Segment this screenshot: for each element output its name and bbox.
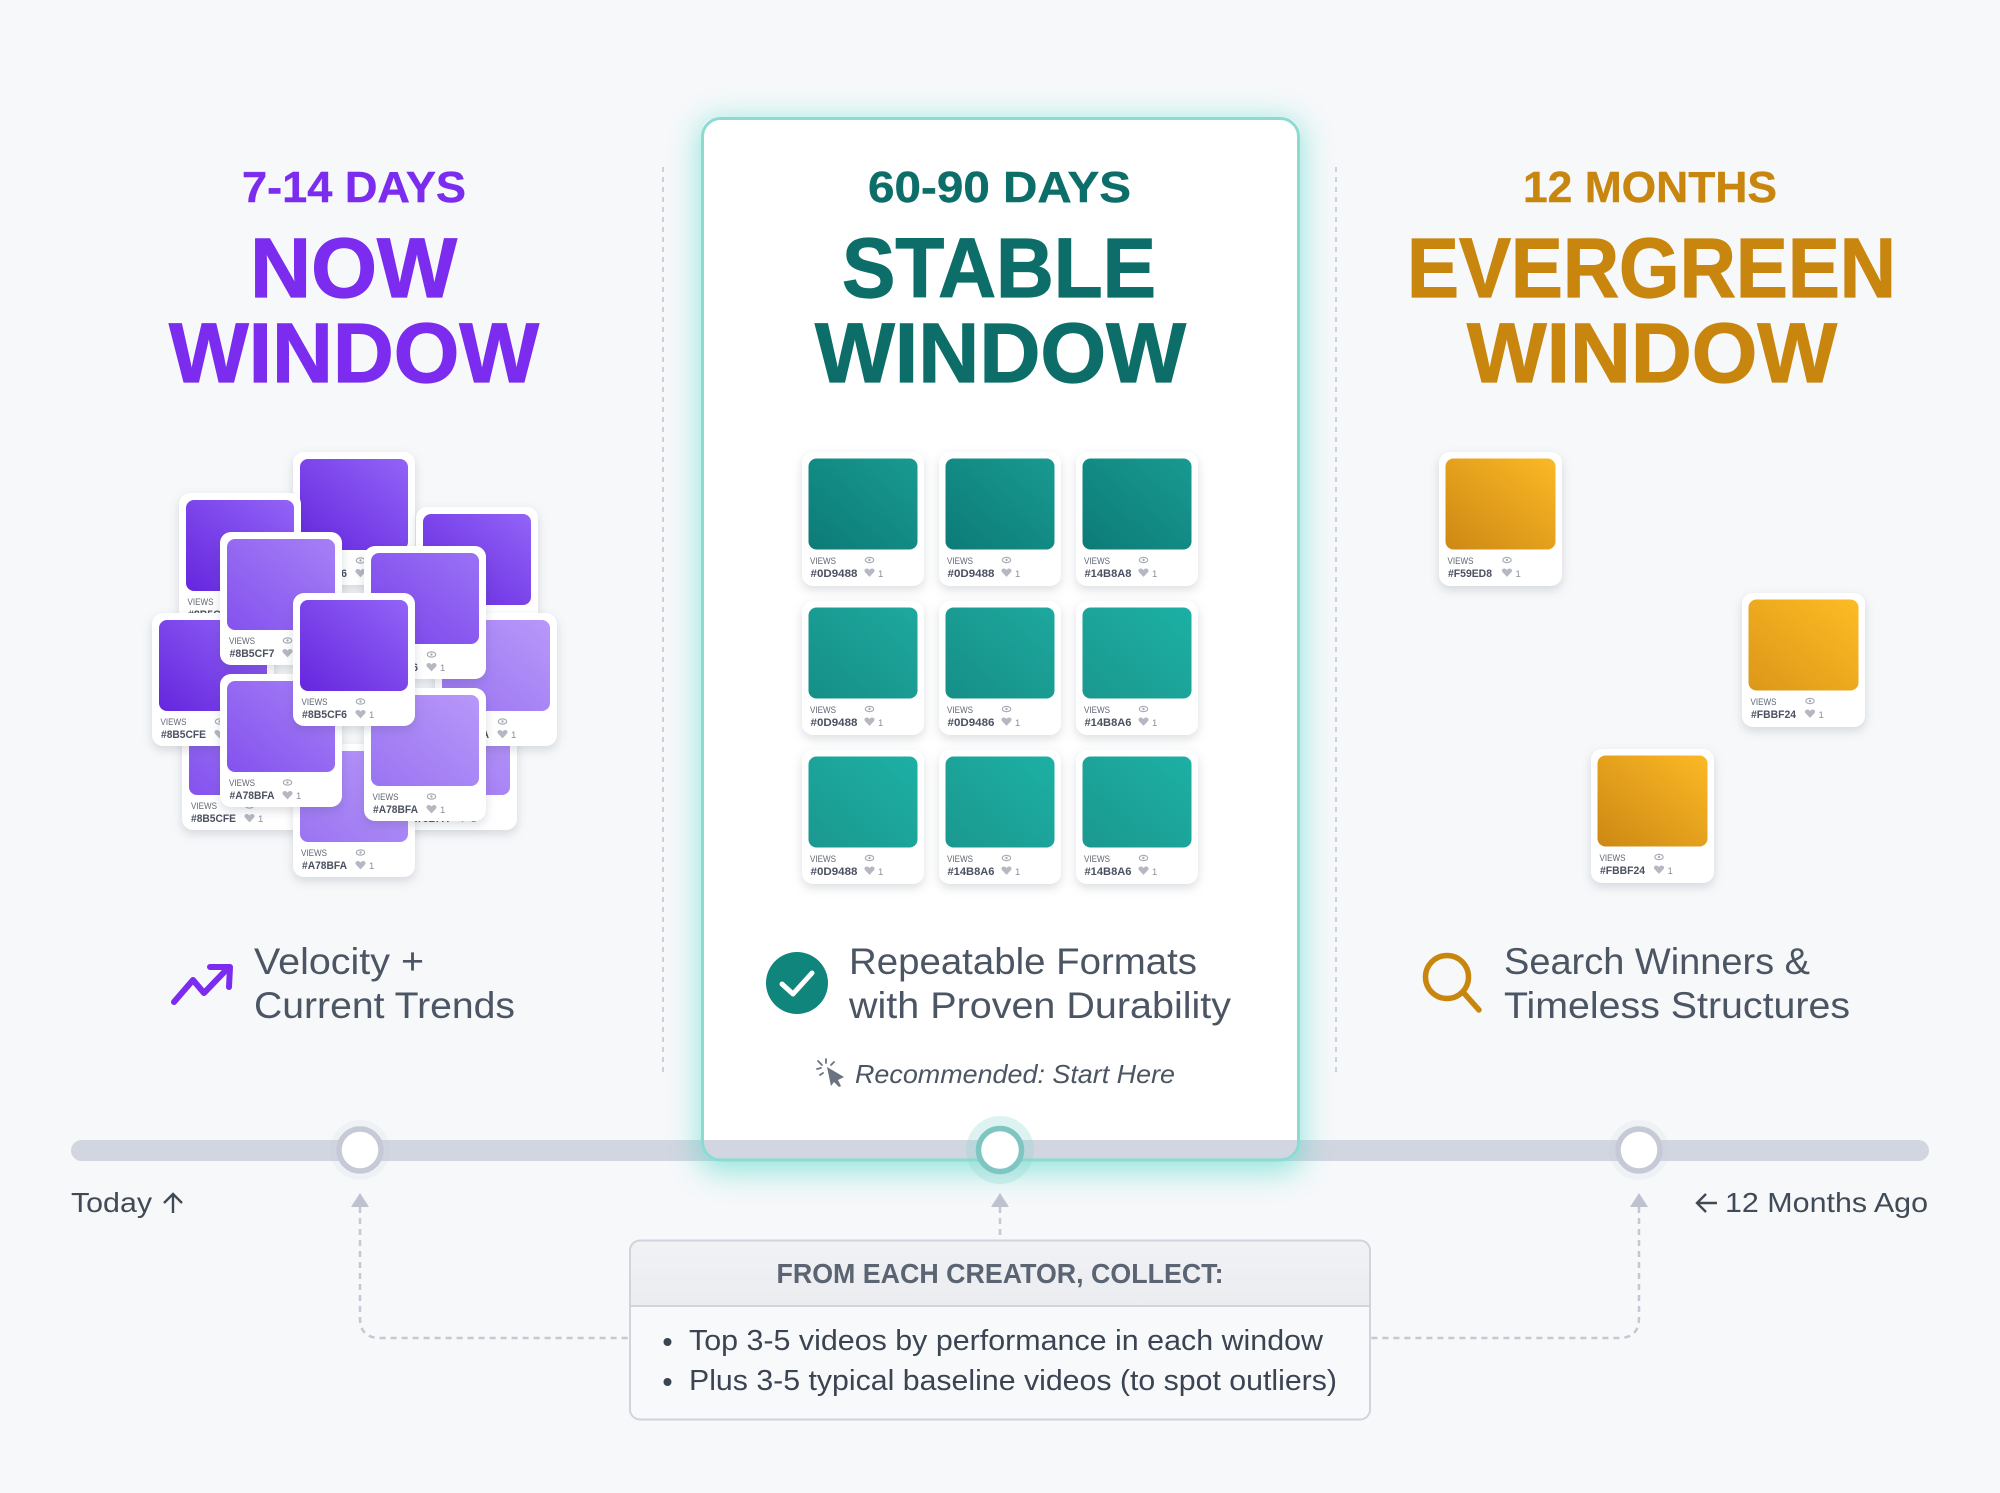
card lower right — [395, 697, 517, 830]
card upper left — [1439, 452, 1562, 586]
card r1c3: VIEWS — [1084, 556, 1110, 567]
video cards: evergreen — [1439, 452, 1865, 883]
card r3c1: #0D9488 — [810, 866, 858, 878]
bullet list: Plus 3-5 typical baseline videos (to spot outliers) — [689, 1365, 1337, 1397]
card inner upper left: 1 — [296, 649, 301, 660]
card bottom: 1 — [1668, 866, 1673, 877]
card r1c3: 1 — [1152, 569, 1157, 580]
icon: trending arrow — [174, 967, 230, 1002]
card lower right: VIEWS — [404, 801, 430, 812]
card r1c3: #14B8A8 — [1084, 568, 1132, 580]
card bottom: 1 — [369, 861, 374, 872]
card upper left: #F59ED8 — [1448, 568, 1492, 580]
card inner lower right: 1 — [440, 805, 445, 816]
card upper left: 1 — [255, 610, 260, 621]
card r2c3: 1 — [1152, 718, 1157, 729]
card top: VIEWS — [302, 556, 328, 567]
card middle left: #8B5CFE — [161, 729, 206, 741]
card r3c2: #14B8A6 — [948, 866, 994, 878]
card r1c2: #0D9488 — [948, 568, 994, 580]
evergreen description — [1504, 941, 1850, 1026]
card r1c3 — [1076, 452, 1198, 586]
box header background — [630, 1240, 1370, 1306]
now window description — [254, 941, 515, 1026]
card bottom — [293, 744, 415, 877]
card r3c3 — [1076, 750, 1198, 884]
card r1c1: 1 — [878, 569, 883, 580]
now window title line 1: NOW — [250, 221, 458, 315]
card upper left: 1 — [1516, 569, 1521, 580]
card upper left: VIEWS — [1448, 556, 1474, 567]
card inner lower right: #A78BFA — [373, 804, 418, 816]
card inner lower right: VIEWS — [372, 792, 398, 803]
card upper left: #8B5CF6 — [188, 609, 233, 621]
video cards cluster: now — [152, 452, 557, 877]
box heading: FROM EACH CREATOR, COLLECT: — [776, 1258, 1224, 1289]
stable window title line 1: STABLE — [842, 221, 1156, 315]
card right: #FBBF24 — [1751, 709, 1797, 721]
card middle left: VIEWS — [160, 717, 186, 728]
bullet list — [664, 1325, 1337, 1397]
card r2c1: #0D9488 — [810, 717, 858, 729]
card r2c2: #0D9486 — [948, 717, 994, 729]
column: stable window — [766, 164, 1232, 1089]
card lower left: 1 — [258, 814, 263, 825]
stable window description: with Proven Durability — [848, 985, 1232, 1026]
card r2c3 — [1076, 601, 1198, 735]
card inner upper right: 1 — [440, 663, 445, 674]
timeline label: 12 months ago: 12 Months Ago — [1725, 1187, 1928, 1218]
card top — [293, 452, 415, 585]
card r1c2: VIEWS — [947, 556, 973, 567]
card r1c1: #0D9488 — [810, 568, 858, 580]
card top: 1 — [369, 569, 374, 580]
card center: 1 — [369, 710, 374, 721]
card r3c3: #14B8A6 — [1084, 866, 1132, 878]
card upper left: VIEWS — [188, 597, 214, 608]
card bottom: VIEWS — [1600, 853, 1626, 864]
timeline label: today — [71, 1187, 182, 1218]
card r1c1: VIEWS — [810, 556, 836, 567]
now window title line 2: WINDOW — [169, 306, 540, 400]
card center: VIEWS — [302, 697, 328, 708]
card r3c2 — [939, 750, 1061, 884]
card r3c1: 1 — [878, 867, 883, 878]
card middle left — [152, 613, 274, 746]
now window time range: 7-14 DAYS — [242, 164, 466, 212]
card r3c3: 1 — [1152, 867, 1157, 878]
recommended note: Recommended: Start Here — [855, 1059, 1175, 1089]
column: now window — [152, 164, 557, 1026]
card r3c2: 1 — [1015, 867, 1020, 878]
card bottom — [1591, 749, 1714, 883]
arrow: box to evergreen node — [1371, 1193, 1648, 1338]
card lower right: 1 — [471, 814, 476, 825]
card middle right — [435, 613, 557, 746]
card inner upper left — [220, 532, 342, 665]
card inner upper left: VIEWS — [229, 636, 255, 647]
card inner lower right — [364, 688, 486, 821]
card middle right: 1 — [511, 730, 516, 741]
card r2c2: VIEWS — [947, 705, 973, 716]
timeline bar — [71, 1140, 1929, 1161]
stable window description: Repeatable Formats — [849, 941, 1197, 982]
now window description: Current Trends — [254, 985, 515, 1026]
card r2c1: 1 — [878, 718, 883, 729]
bullet list: Top 3-5 videos by performance in each window — [689, 1325, 1324, 1357]
timeline node: now — [330, 1120, 390, 1180]
card r3c2: VIEWS — [947, 854, 973, 865]
card upper right: VIEWS — [424, 611, 450, 622]
card r2c3: VIEWS — [1084, 705, 1110, 716]
arrow: box to stable node — [991, 1193, 1009, 1240]
card inner upper left: #8B5CF7 — [230, 648, 274, 660]
card upper right: #8B5CF6 — [425, 623, 470, 635]
card r2c2: 1 — [1015, 718, 1020, 729]
icon: cursor click — [817, 1059, 844, 1087]
card center — [293, 593, 415, 726]
evergreen time range: 12 MONTHS — [1523, 164, 1777, 212]
card lower left: #8B5CFE — [191, 813, 236, 825]
panel: stable window background — [701, 117, 1300, 1161]
card right: 1 — [1818, 710, 1824, 721]
card middle right: VIEWS — [444, 717, 470, 728]
card bottom: VIEWS — [301, 848, 327, 859]
card right — [1742, 593, 1865, 727]
panel: from each creator collect — [630, 1240, 1370, 1420]
card r3c1: VIEWS — [810, 854, 836, 865]
card inner upper right — [364, 546, 486, 679]
card bottom: #FBBF24 — [1600, 865, 1646, 877]
video cards grid: stable — [802, 452, 1198, 884]
arrow: box to now node — [351, 1193, 629, 1338]
card inner lower left: VIEWS — [229, 778, 255, 789]
icon: magnifier — [1426, 956, 1479, 1010]
card r2c1 — [802, 601, 924, 735]
icon: check circle — [766, 952, 828, 1014]
column divider right — [1335, 167, 1337, 1075]
card r3c1 — [802, 750, 924, 884]
card r3c3: VIEWS — [1084, 854, 1110, 865]
panel glow — [699, 120, 1302, 1172]
card r1c2: 1 — [1015, 569, 1020, 580]
stable window time range: 60-90 DAYS — [868, 164, 1131, 212]
card upper right — [416, 507, 538, 640]
card lower left: VIEWS — [191, 801, 217, 812]
card inner lower left: #A78BFA — [230, 790, 275, 802]
evergreen title line 1: EVERGREEN — [1407, 221, 1896, 315]
card upper right: 1 — [492, 624, 497, 635]
card center: #8B5CF6 — [302, 709, 347, 721]
now window description: Velocity + — [254, 941, 424, 982]
card r1c2 — [939, 452, 1061, 586]
card right: VIEWS — [1750, 697, 1776, 708]
column: evergreen window — [1407, 164, 1896, 1026]
card r2c3: #14B8A6 — [1084, 717, 1132, 729]
card bottom: #A78BFA — [302, 860, 347, 872]
card r1c1 — [802, 452, 924, 586]
stable window description — [848, 941, 1232, 1026]
column divider left — [662, 167, 664, 1075]
card middle left: 1 — [228, 730, 233, 741]
card r2c1: VIEWS — [810, 705, 836, 716]
card upper left — [179, 493, 301, 626]
card middle right: #A78BFA — [444, 729, 489, 741]
timeline node: evergreen — [1609, 1120, 1669, 1180]
card inner upper right: #8B5CF6 — [373, 662, 418, 674]
card inner lower left: 1 — [296, 791, 301, 802]
card inner upper right: VIEWS — [372, 650, 398, 661]
evergreen description: Timeless Structures — [1504, 985, 1850, 1026]
evergreen title line 2: WINDOW — [1467, 306, 1838, 400]
timeline node: stable — [966, 1116, 1034, 1184]
timeline label: today: Today — [71, 1187, 152, 1218]
stable window title line 2: WINDOW — [815, 306, 1187, 400]
card lower left — [182, 697, 304, 830]
card lower right: #A78BFA — [404, 813, 449, 825]
card inner lower left — [220, 674, 342, 807]
evergreen description: Search Winners & — [1504, 941, 1810, 982]
card top: #8B5CF6 — [302, 568, 347, 580]
card r2c2 — [939, 601, 1061, 735]
